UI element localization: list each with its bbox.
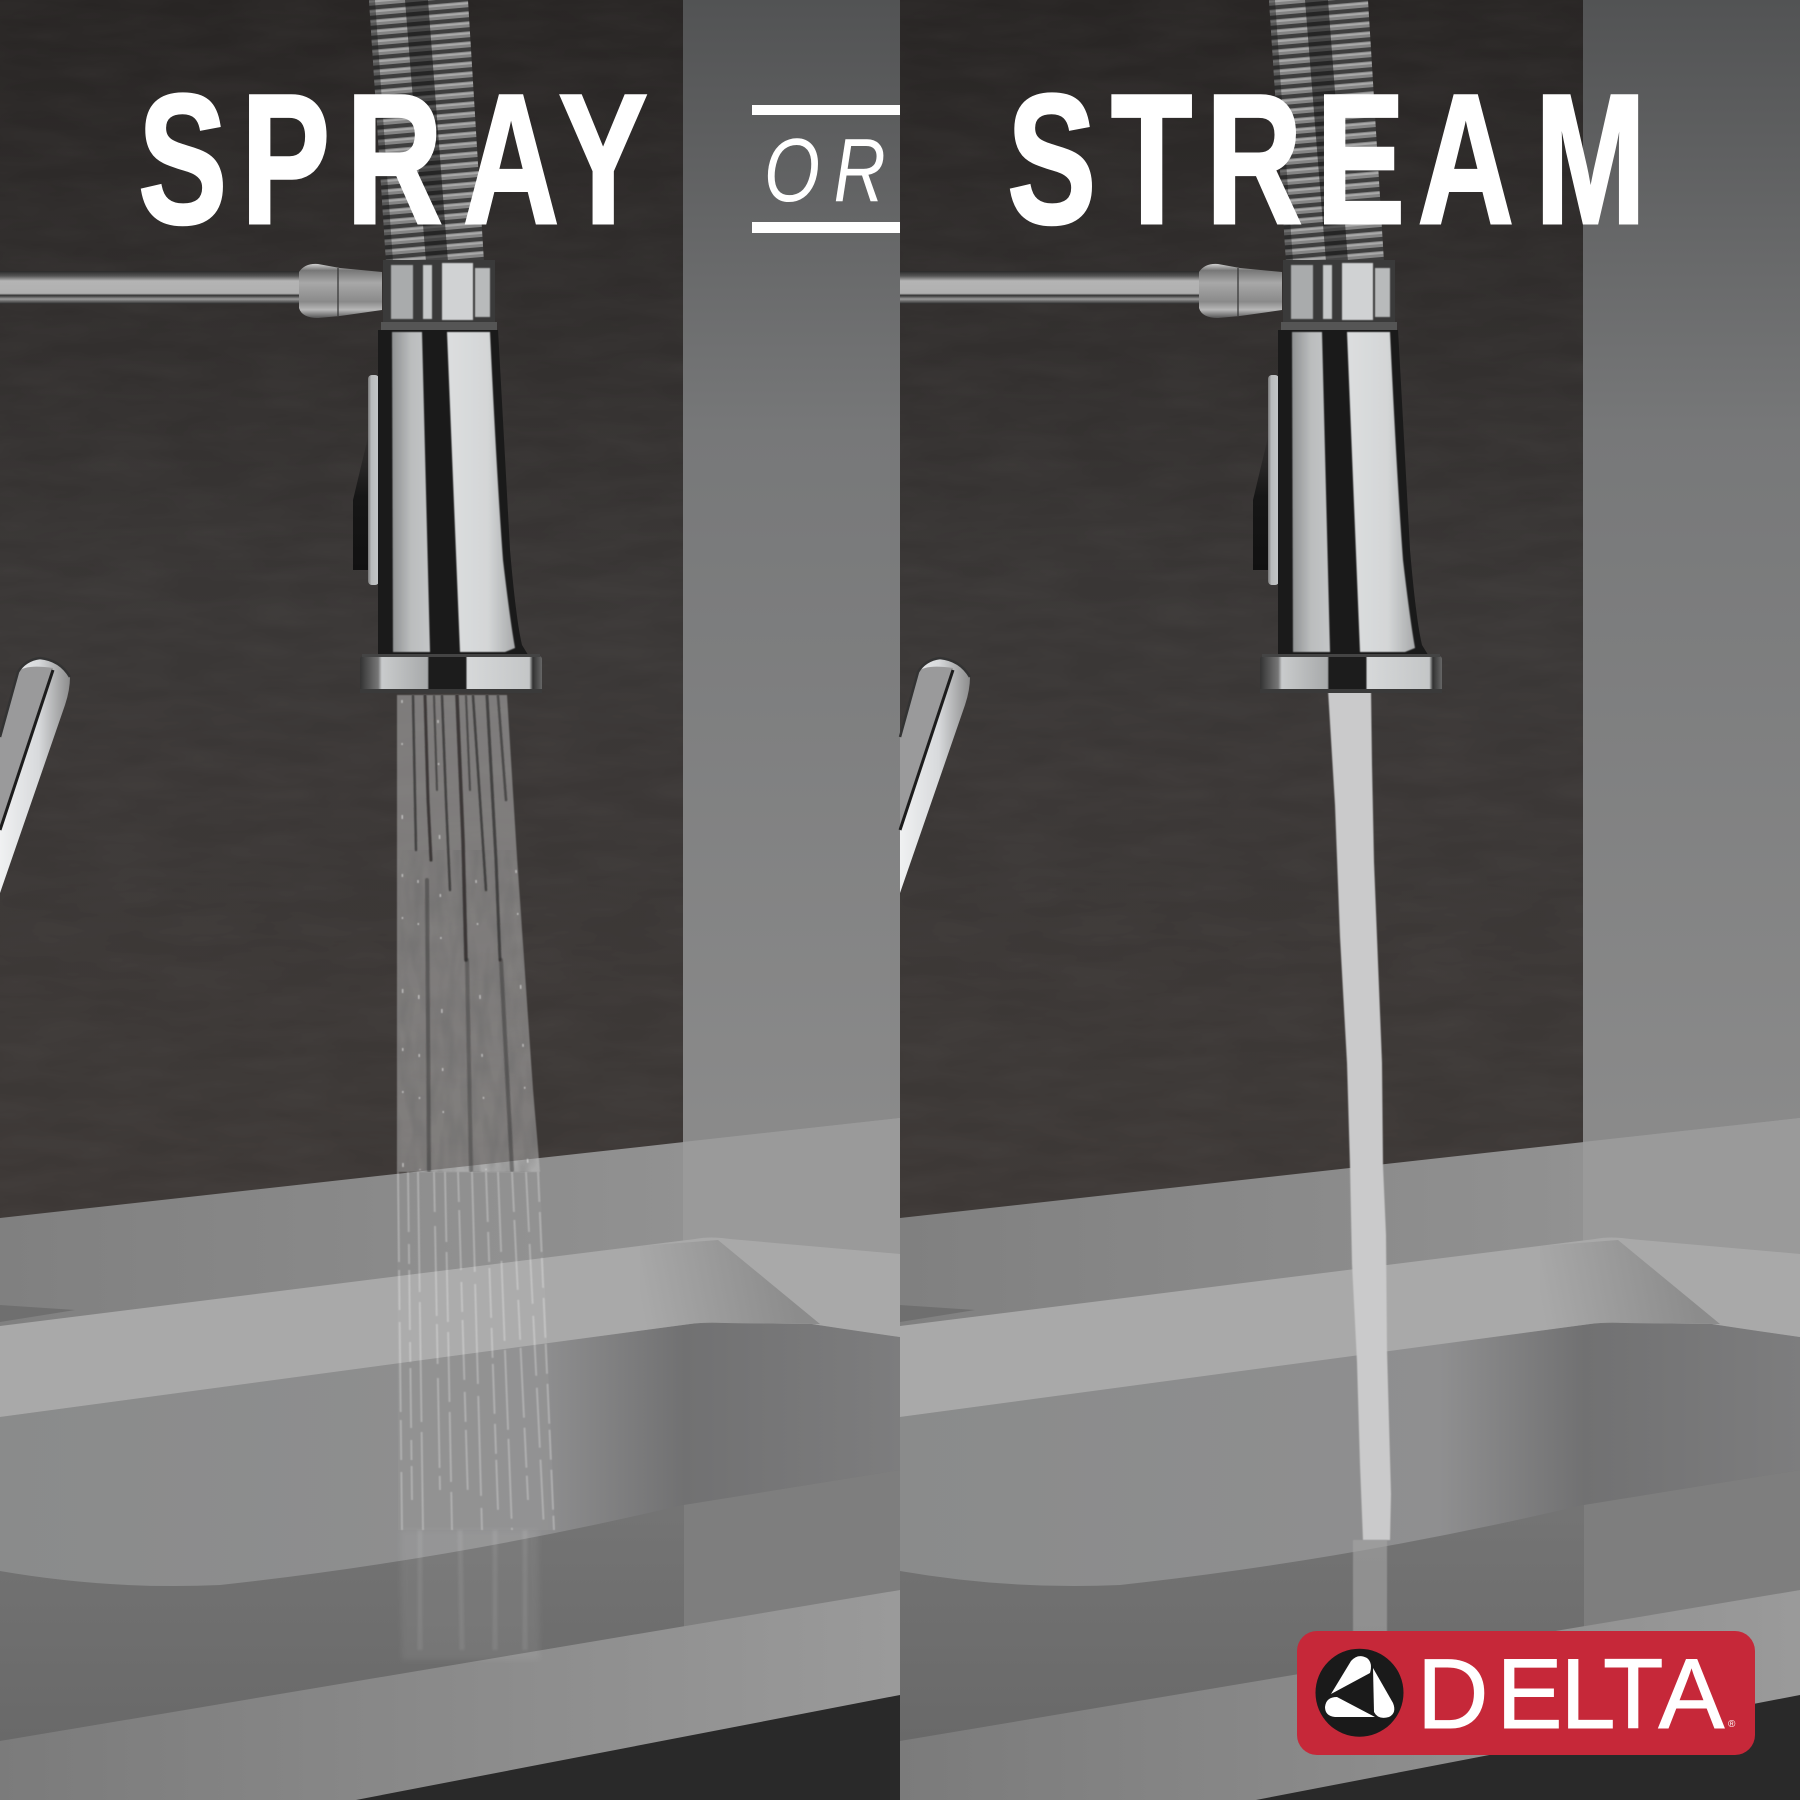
panel: spray photo xyxy=(0,0,900,1800)
faucet, right xyxy=(900,0,1442,893)
logo wordmark: DELTA xyxy=(1417,1638,1724,1749)
faucet, left xyxy=(0,0,542,893)
sink background scene, right xyxy=(900,0,1800,1800)
heading: SPRAY: SPRAY xyxy=(138,57,648,263)
icon: Delta triangle mark xyxy=(1316,1649,1404,1737)
water stream xyxy=(1328,690,1391,1640)
registered mark: ® xyxy=(1728,1719,1736,1730)
water spray xyxy=(390,695,555,1660)
sink background scene, left xyxy=(0,0,900,1800)
logo: Delta badge xyxy=(1297,1631,1755,1755)
divider: OR xyxy=(752,105,900,233)
panel: stream photo xyxy=(900,0,1800,1800)
divider: OR: OR xyxy=(764,120,886,221)
heading: STREAM: STREAM xyxy=(1007,57,1646,263)
